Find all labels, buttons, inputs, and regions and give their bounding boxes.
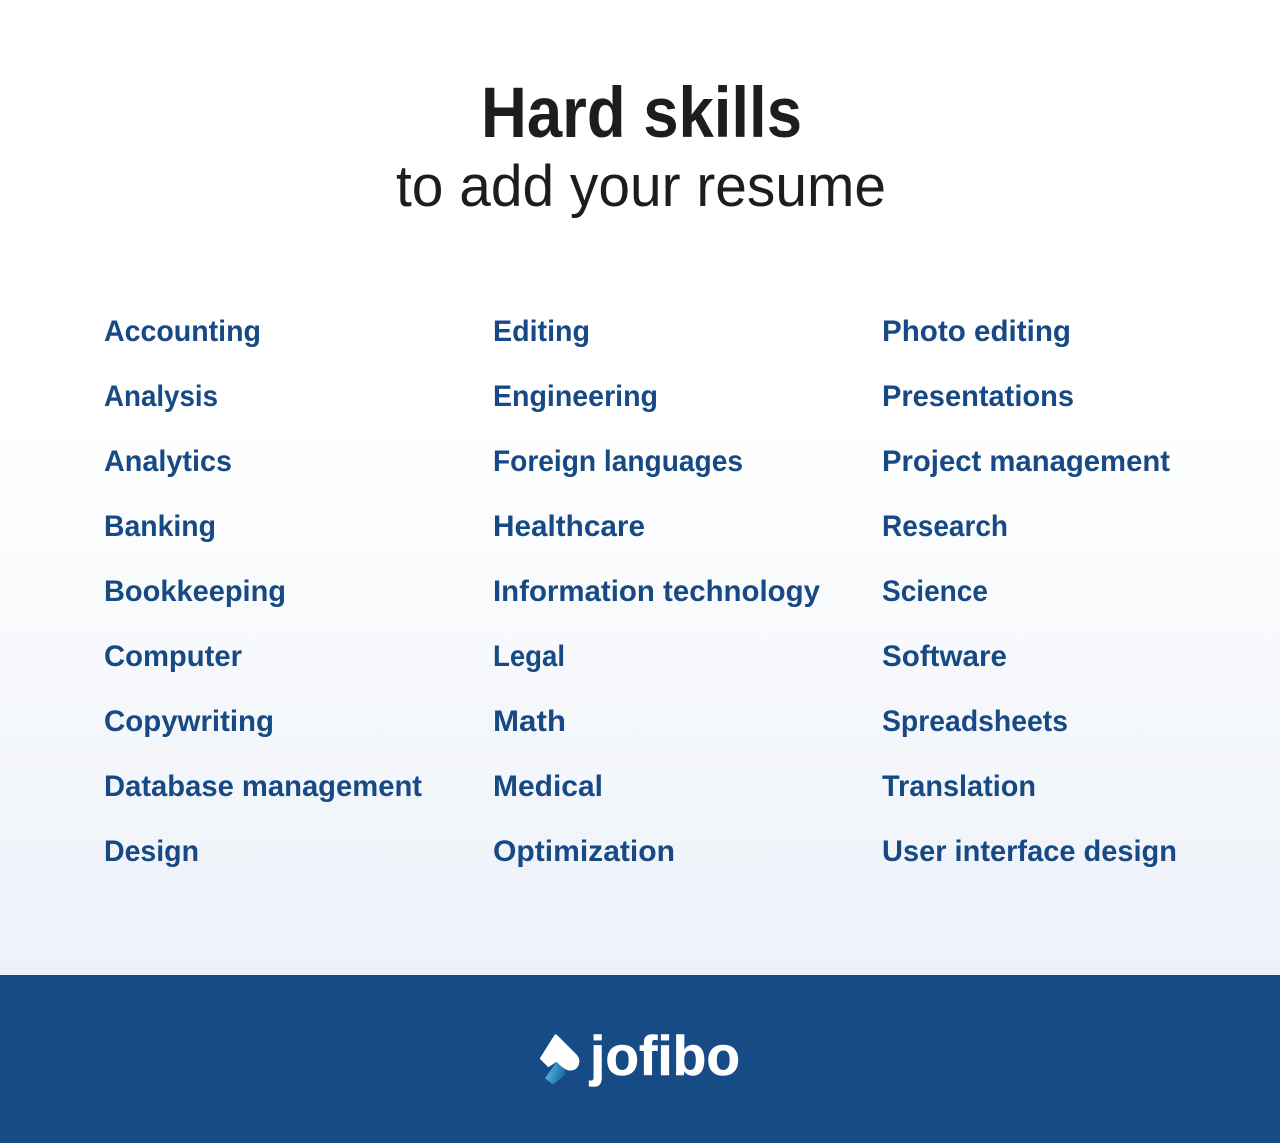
skill: Analysis bbox=[104, 380, 218, 413]
skill: Photo editing bbox=[882, 315, 1071, 348]
heading: Hard skills: Hard skills bbox=[481, 74, 802, 153]
skill: Copywriting bbox=[104, 705, 274, 738]
skill: Engineering bbox=[493, 380, 658, 413]
skill: Translation bbox=[882, 770, 1036, 803]
skill: Bookkeeping bbox=[104, 575, 286, 608]
skill: Accounting bbox=[104, 315, 261, 348]
skills column 1 bbox=[104, 315, 422, 868]
logo wordmark: jofibo bbox=[589, 1024, 740, 1087]
title block bbox=[396, 74, 886, 219]
skill: Medical bbox=[493, 770, 603, 803]
icon: jofibo spade logo bbox=[540, 1034, 579, 1084]
skill: Spreadsheets bbox=[882, 705, 1068, 738]
skill: User interface design bbox=[882, 835, 1177, 868]
skill: Computer bbox=[104, 640, 242, 673]
skill: Information technology bbox=[493, 575, 820, 608]
skill: Project management bbox=[882, 445, 1170, 478]
skill: Editing bbox=[493, 315, 590, 348]
skill: Optimization bbox=[493, 835, 675, 868]
skills column 2 bbox=[493, 315, 820, 868]
skill: Math bbox=[493, 705, 566, 738]
skill: Design bbox=[104, 835, 199, 868]
skill: Software bbox=[882, 640, 1007, 673]
skill: Analytics bbox=[104, 445, 232, 478]
skill: Healthcare bbox=[493, 510, 645, 543]
skill: Database management bbox=[104, 770, 422, 803]
skill: Banking bbox=[104, 510, 216, 543]
subheading: to add your resume bbox=[396, 154, 886, 219]
skill: Presentations bbox=[882, 380, 1074, 413]
skill: Foreign languages bbox=[493, 445, 743, 478]
skills column 3 bbox=[882, 315, 1177, 868]
footer band bbox=[0, 975, 1280, 1143]
skill: Legal bbox=[493, 640, 565, 673]
skill: Research bbox=[882, 510, 1008, 543]
skill: Science bbox=[882, 575, 988, 608]
